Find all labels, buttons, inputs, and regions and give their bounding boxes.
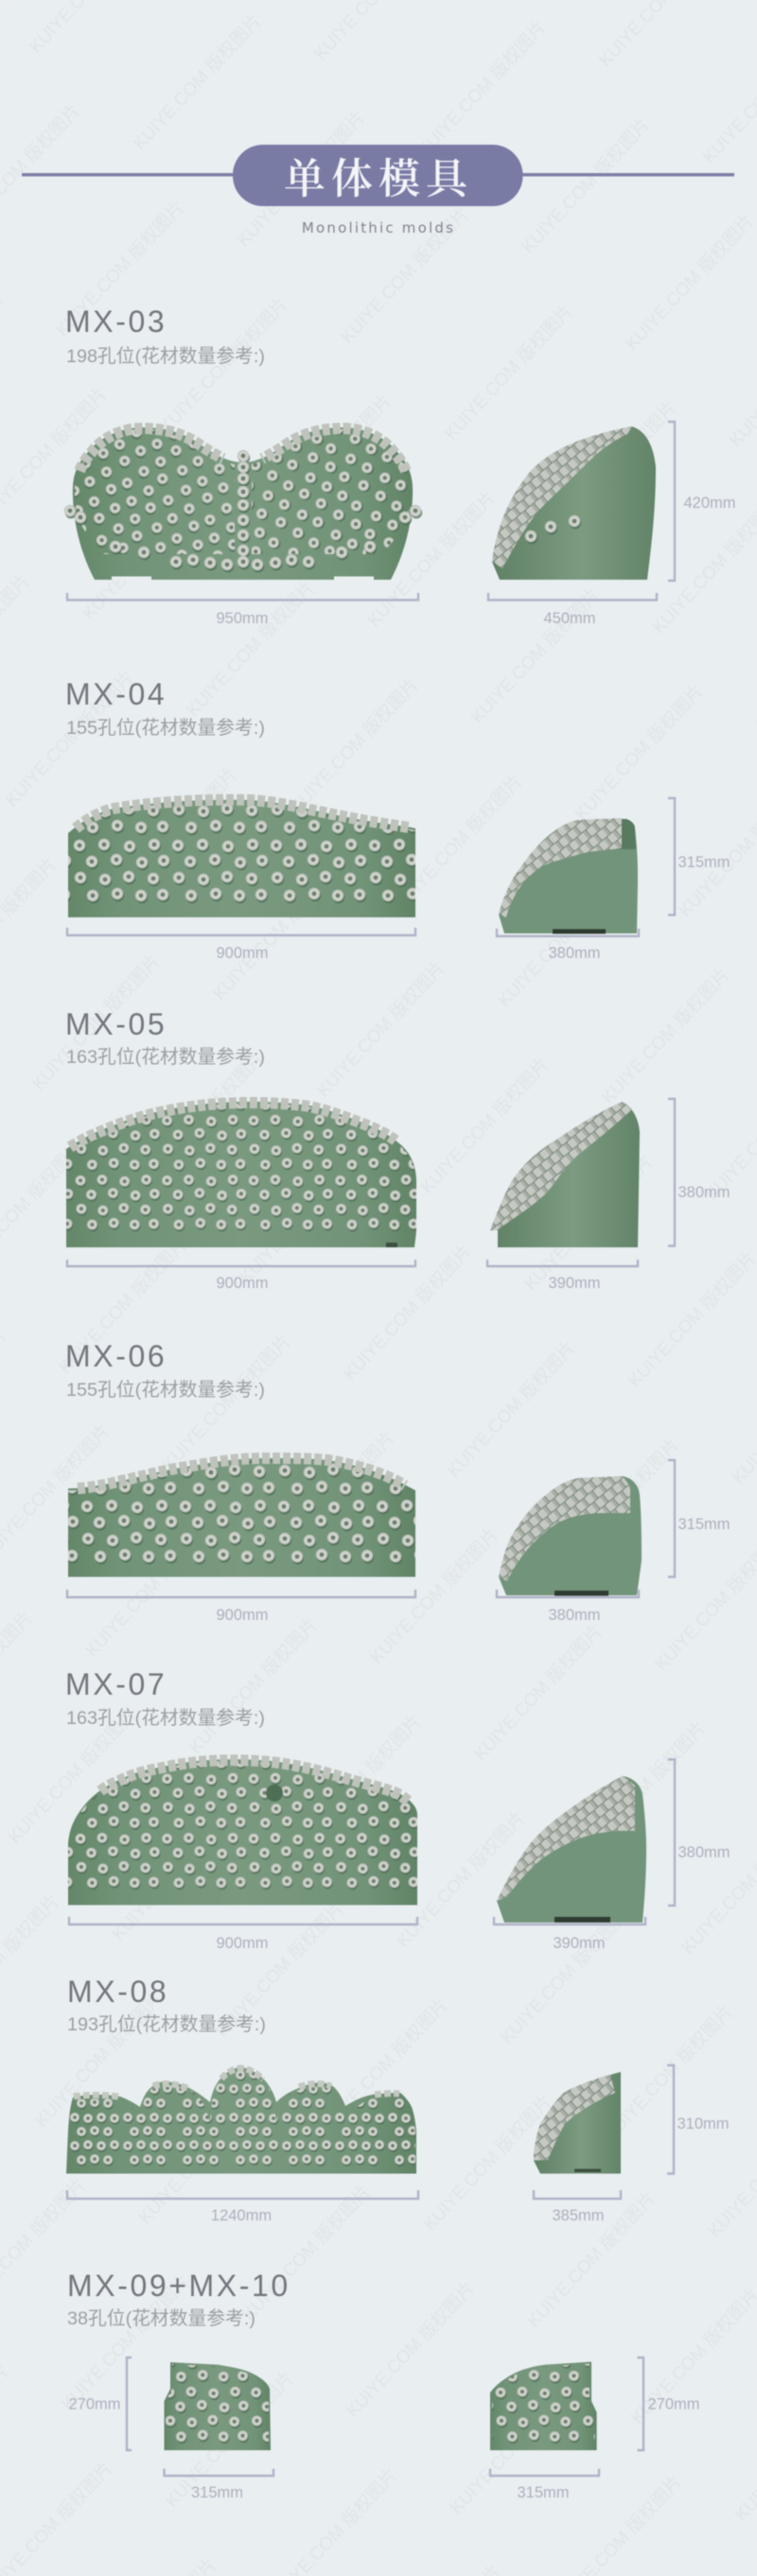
MX-08 front view mold: [66, 2067, 416, 2173]
MX-08 height bracket: [667, 2065, 674, 2173]
MX-10 width bracket: [490, 2468, 599, 2476]
MX-09 width bracket: [165, 2468, 273, 2476]
MX-07 title: MX-07: [65, 1667, 167, 1701]
MX-03 width bracket: [67, 593, 418, 600]
MX-06 side view mold: [499, 1476, 642, 1596]
MX-10 height label: 270mm: [647, 2396, 700, 2413]
MX-05 width label: 900mm: [216, 1275, 269, 1292]
MX-04 side width label: 380mm: [548, 945, 601, 962]
panel: MX-09 + MX-10: [67, 2269, 700, 2501]
MX-06 height bracket: [668, 1460, 675, 1577]
MX-03 height bracket: [668, 422, 675, 581]
header: section title: [22, 145, 734, 236]
MX-07 width bracket: [69, 1917, 417, 1924]
MX-05 front view mold: [66, 1102, 416, 1247]
MX-10 mold: [490, 2362, 597, 2450]
MX-08 hole count: 193孔位(花材数量参考:): [67, 2014, 266, 2035]
MX-08 side width label: 385mm: [552, 2207, 605, 2224]
panel: MX-05: [65, 1007, 731, 1292]
MX-03 front view mold: [64, 427, 422, 581]
panel: MX-03: [64, 305, 736, 627]
MX-06 side width label: 380mm: [548, 1607, 601, 1624]
MX-03 side width bracket: [488, 593, 657, 600]
MX-03 hole count: 198孔位(花材数量参考:): [66, 346, 265, 367]
MX-05 side width label: 390mm: [548, 1275, 601, 1292]
panel: MX-08: [66, 1975, 730, 2224]
MX-05 side width bracket: [487, 1260, 638, 1266]
MX-08 width bracket: [67, 2190, 418, 2199]
MX-03 width label: 950mm: [216, 610, 269, 627]
MX-06 front view mold: [68, 1458, 415, 1577]
MX-04 height bracket: [668, 798, 675, 915]
MX-04 hole count: 155孔位(花材数量参考:): [66, 718, 265, 739]
MX-03 side view mold: [492, 426, 656, 580]
MX-04 height label: 315mm: [678, 854, 731, 871]
MX-08 side width bracket: [534, 2190, 621, 2199]
MX-05 hole count: 163孔位(花材数量参考:): [66, 1047, 265, 1068]
MX-09 width label: 315mm: [191, 2484, 243, 2501]
MX-07 side view mold: [497, 1776, 646, 1923]
MX-08 width label: 1240mm: [211, 2207, 272, 2224]
MX-06 hole count: 155孔位(花材数量参考:): [66, 1380, 265, 1401]
MX-07 height label: 380mm: [678, 1844, 731, 1861]
MX-07 side width bracket: [494, 1917, 645, 1924]
MX-07 side width label: 390mm: [553, 1935, 606, 1952]
MX-04 side view mold: [499, 818, 638, 934]
MX-06 side width bracket: [497, 1590, 639, 1597]
MX-05 title: MX-05: [65, 1007, 167, 1041]
panel: MX-06: [65, 1339, 731, 1624]
MX-06 width label: 900mm: [216, 1607, 269, 1624]
MX-03 side width label: 450mm: [543, 610, 596, 627]
MX-04 title: MX-04: [65, 677, 167, 711]
panel: MX-07: [65, 1667, 731, 1952]
MX-04 side width bracket: [497, 929, 639, 936]
MX-07 height bracket: [668, 1759, 675, 1906]
panel: MX-04: [65, 677, 731, 962]
MX-03 title: MX-03: [65, 305, 167, 339]
MX-08 height label: 310mm: [677, 2115, 730, 2132]
MX-05 side view mold: [490, 1102, 640, 1247]
MX-03 height label: 420mm: [683, 495, 736, 512]
MX-04 width label: 900mm: [216, 945, 269, 962]
MX-04 width bracket: [67, 928, 415, 935]
MX-10 height bracket: [638, 2358, 643, 2450]
MX-05 height label: 380mm: [678, 1184, 731, 1201]
MX-07 width label: 900mm: [216, 1935, 269, 1952]
MX-08 side view mold: [534, 2072, 621, 2173]
MX-06 title: MX-06: [65, 1339, 167, 1373]
MX-04 front view mold: [68, 800, 415, 917]
header: section title: Monolithic molds: [302, 219, 455, 236]
MX-10 width label: 315mm: [517, 2484, 570, 2501]
MX-09 height bracket: [127, 2358, 132, 2450]
MX-09 mold: [165, 2362, 271, 2450]
MX-07 hole count: 163孔位(花材数量参考:): [66, 1708, 265, 1729]
MX-07 front view mold: [68, 1759, 417, 1905]
MX-09 + MX-10 title: MX-09+MX-10: [67, 2269, 290, 2303]
header: section title: 单体模具: [284, 145, 473, 205]
MX-05 height bracket: [668, 1099, 675, 1246]
MX-09 + MX-10 hole count: 38孔位(花材数量参考:): [67, 2308, 255, 2329]
MX-08 title: MX-08: [67, 1975, 168, 2009]
MX-06 height label: 315mm: [678, 1516, 731, 1533]
MX-05 width bracket: [67, 1260, 415, 1266]
MX-06 width bracket: [67, 1590, 415, 1597]
MX-09 height label: 270mm: [68, 2396, 121, 2413]
